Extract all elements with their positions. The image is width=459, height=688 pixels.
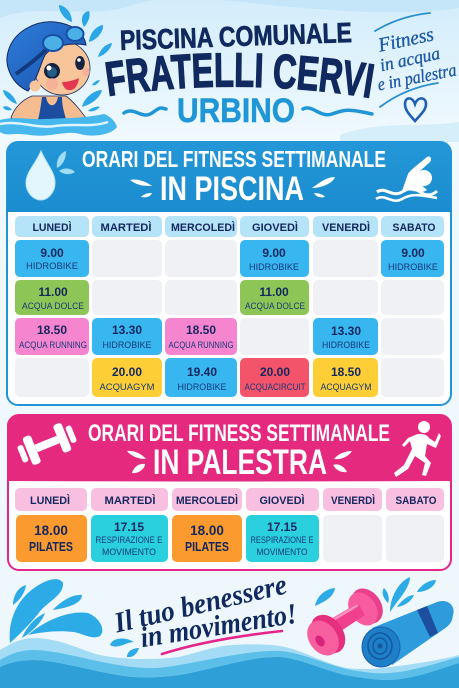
gym day headers: LUNEDÌ: [30, 494, 70, 507]
class: Thursday 9.00 Hidrobike: [240, 240, 309, 277]
class: Saturday 9.00 Hidrobike: HIDROBIKE: [388, 262, 438, 273]
heading: in palestra: IN PALESTRA: [153, 443, 327, 482]
gym empty cells: [323, 515, 444, 562]
class: Thursday 17.15 Respirazione e Movimento: [246, 515, 319, 562]
class: Monday 9.00 Hidrobike: [15, 240, 89, 277]
main title: [105, 17, 374, 98]
city name: Urbino: URBINO: [177, 92, 295, 130]
class: Tuesday 17.15 Respirazione e Movimento: [91, 515, 168, 562]
gym panel header: [7, 415, 451, 482]
pool day headers: VENERDÌ: [322, 221, 370, 234]
pool day headers: MERCOLEDÌ: [171, 221, 235, 234]
gym day headers: MERCOLEDÌ: [176, 494, 238, 507]
tagline: Fitness in acqua e in palestra: Fitness: [375, 23, 436, 57]
class: Thursday 17.15 Respirazione e Movimento: MOVIMENTO: [256, 547, 308, 558]
gym day headers: MARTEDÌ: [104, 494, 156, 507]
slogan: Il tuo benessere: [110, 569, 290, 640]
icon: swimmer: [376, 157, 437, 201]
icon: dumbbell: [14, 419, 80, 469]
gym day headers: GIOVEDÌ: [260, 494, 304, 507]
gym day headers: VENERDÌ: [331, 494, 375, 507]
pool day headers: SABATO: [392, 222, 436, 234]
class: Tuesday 13.30 Hidrobike: 13.30: [112, 323, 142, 337]
icon: runner: [394, 421, 441, 477]
class: Monday 18.00 Pilates: 18.00: [34, 523, 68, 538]
pool day headers: GIOVEDÌ: [252, 221, 298, 234]
class: Tuesday 13.30 Hidrobike: [92, 318, 162, 355]
class: Friday 13.30 Hidrobike: HIDROBIKE: [322, 340, 370, 351]
class: Thursday 9.00 Hidrobike: 9.00: [262, 246, 286, 260]
icon: rolled mat: [362, 601, 454, 667]
class: Wednesday 18.50 Acqua Running: 18.50: [186, 323, 216, 337]
class: Tuesday 20.00 Acquagym: 20.00: [112, 365, 142, 379]
splash left: [10, 579, 139, 657]
class: Thursday 17.15 Respirazione e Movimento: 17.15: [267, 520, 297, 534]
icon: heart: [405, 98, 426, 121]
class: Tuesday 20.00 Acquagym: [92, 358, 162, 397]
gym day headers: SABATO: [396, 495, 437, 507]
class: Tuesday 17.15 Respirazione e Movimento: RESPIRAZIONE E: [96, 535, 162, 546]
class: Monday 18.50 Acqua Running: 18.50: [37, 323, 67, 337]
pool panel header: [7, 142, 451, 212]
tagline: Fitness in acqua e in palestra: in acqua: [378, 43, 442, 75]
heading: in piscina: IN PISCINA: [160, 170, 304, 208]
panel: pool schedule: [7, 142, 451, 405]
pool empty cells: [15, 240, 444, 397]
class: Wednesday 19.40 Hidrobike: [165, 358, 237, 397]
class: Friday 18.50 Acquagym: ACQUAGYM: [320, 382, 372, 393]
pool day headers: MARTEDÌ: [100, 221, 152, 234]
class: Monday 11.00 Acqua Dolce: ACQUA DOLCE: [22, 301, 84, 312]
bottom waves: [0, 638, 459, 688]
icon: pink dumbbell: [301, 582, 389, 662]
class: Wednesday 18.50 Acqua Running: ACQUA RUNNING: [168, 340, 234, 351]
small splashes right: [315, 577, 436, 612]
class: Wednesday 18.00 Pilates: [172, 515, 242, 562]
class: Thursday 17.15 Respirazione e Movimento: RESPIRAZIONE E: [250, 535, 314, 546]
class: Monday 11.00 Acqua Dolce: 11.00: [38, 285, 68, 299]
class: Saturday 9.00 Hidrobike: 9.00: [401, 246, 425, 260]
class: Monday 18.00 Pilates: [16, 515, 87, 562]
class: Monday 11.00 Acqua Dolce: [15, 280, 89, 315]
class: Thursday 11.00 Acqua Dolce: [240, 280, 309, 315]
class: Tuesday 17.15 Respirazione e Movimento: MOVIMENTO: [102, 547, 156, 558]
class: Thursday 20.00 Acquacircuit: [240, 358, 309, 397]
city name: Urbino: [124, 92, 372, 130]
class: Monday 9.00 Hidrobike: 9.00: [40, 246, 64, 260]
class: Friday 13.30 Hidrobike: 13.30: [331, 324, 361, 338]
class: Friday 13.30 Hidrobike: [313, 318, 378, 355]
class: Thursday 11.00 Acqua Dolce: ACQUA DOLCE: [245, 301, 305, 312]
pool day headers: LUNEDÌ: [32, 221, 72, 234]
icon: water drop: [26, 151, 55, 200]
class: Monday 18.50 Acqua Running: ACQUA RUNNING: [19, 340, 87, 351]
swimmer mascot: [0, 5, 117, 136]
class: Monday 9.00 Hidrobike: HIDROBIKE: [26, 261, 78, 272]
class: Thursday 9.00 Hidrobike: HIDROBIKE: [249, 262, 299, 273]
panel: gym schedule: [7, 415, 451, 570]
class: Friday 18.50 Acquagym: 18.50: [331, 365, 361, 379]
class: Wednesday 19.40 Hidrobike: 19.40: [187, 365, 217, 379]
pool day headers: [15, 216, 444, 237]
title line: Piscina Comunale: PISCINA COMUNALE: [119, 17, 352, 56]
class: Friday 18.50 Acquagym: [313, 358, 378, 397]
class: Wednesday 18.50 Acqua Running: [165, 318, 237, 355]
class: Tuesday 13.30 Hidrobike: HIDROBIKE: [102, 340, 152, 351]
class: Saturday 9.00 Hidrobike: [381, 240, 444, 277]
class: Wednesday 19.40 Hidrobike: HIDROBIKE: [178, 382, 226, 393]
gym day headers: [15, 488, 444, 511]
class: Monday 18.00 Pilates: PILATES: [29, 539, 73, 554]
class: Wednesday 18.00 Pilates: PILATES: [185, 539, 229, 554]
class: Tuesday 20.00 Acquagym: ACQUAGYM: [100, 382, 155, 393]
class: Thursday 11.00 Acqua Dolce: 11.00: [259, 285, 289, 299]
tagline: Fitness in acqua e in palestra: [375, 13, 458, 121]
class: Thursday 20.00 Acquacircuit: ACQUACIRCUIT: [244, 382, 306, 393]
title line: Fratelli Cervi: FRATELLI CERVI: [105, 52, 374, 98]
class: Tuesday 17.15 Respirazione e Movimento: 17.15: [114, 520, 144, 534]
class: Wednesday 18.00 Pilates: 18.00: [190, 523, 224, 538]
class: Monday 18.50 Acqua Running: [15, 318, 89, 355]
slogan: in movimento!: [138, 598, 299, 654]
class: Thursday 20.00 Acquacircuit: 20.00: [260, 365, 290, 379]
